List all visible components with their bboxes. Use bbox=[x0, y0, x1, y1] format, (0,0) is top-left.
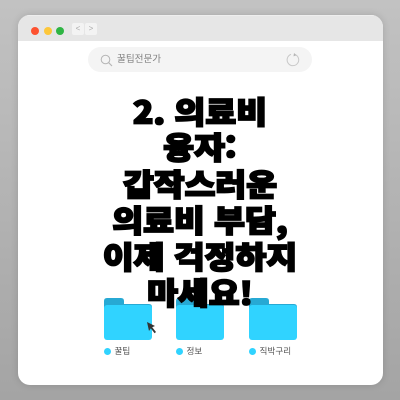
title: 이제 걱정하지 bbox=[103, 232, 297, 277]
close button bbox=[31, 26, 39, 34]
title: 의료비 부담, bbox=[112, 196, 288, 241]
title: 마세요! bbox=[147, 268, 253, 313]
title bar bbox=[18, 15, 382, 41]
title: 2. 의료비 bbox=[133, 87, 267, 132]
folder: 꿀팁 bbox=[104, 298, 152, 340]
search text: 꿀팁전문가 bbox=[117, 54, 161, 65]
forward button bbox=[85, 23, 97, 35]
back button: < bbox=[76, 24, 80, 33]
folder: 직박구리 bbox=[249, 298, 297, 340]
label: 정보 bbox=[176, 346, 202, 356]
search bar bbox=[88, 47, 312, 72]
label: 직박구리: 직박구리 bbox=[260, 346, 291, 356]
back button bbox=[72, 23, 84, 35]
icon: magnifier bbox=[100, 54, 112, 66]
title bbox=[103, 87, 297, 313]
title: 갑작스러운 bbox=[123, 159, 277, 204]
maximise button bbox=[56, 26, 64, 34]
label: 꿀팁: 꿀팁 bbox=[114, 346, 130, 356]
icon: reload bbox=[286, 53, 300, 66]
title: 융자: bbox=[163, 123, 237, 168]
forward button: > bbox=[89, 24, 93, 33]
label: 꿀팁 bbox=[104, 346, 130, 356]
label: 정보: 정보 bbox=[186, 346, 202, 356]
folder: 정보 bbox=[176, 298, 224, 340]
icon: cursor arrow bbox=[147, 322, 156, 334]
minimise button bbox=[44, 26, 52, 34]
